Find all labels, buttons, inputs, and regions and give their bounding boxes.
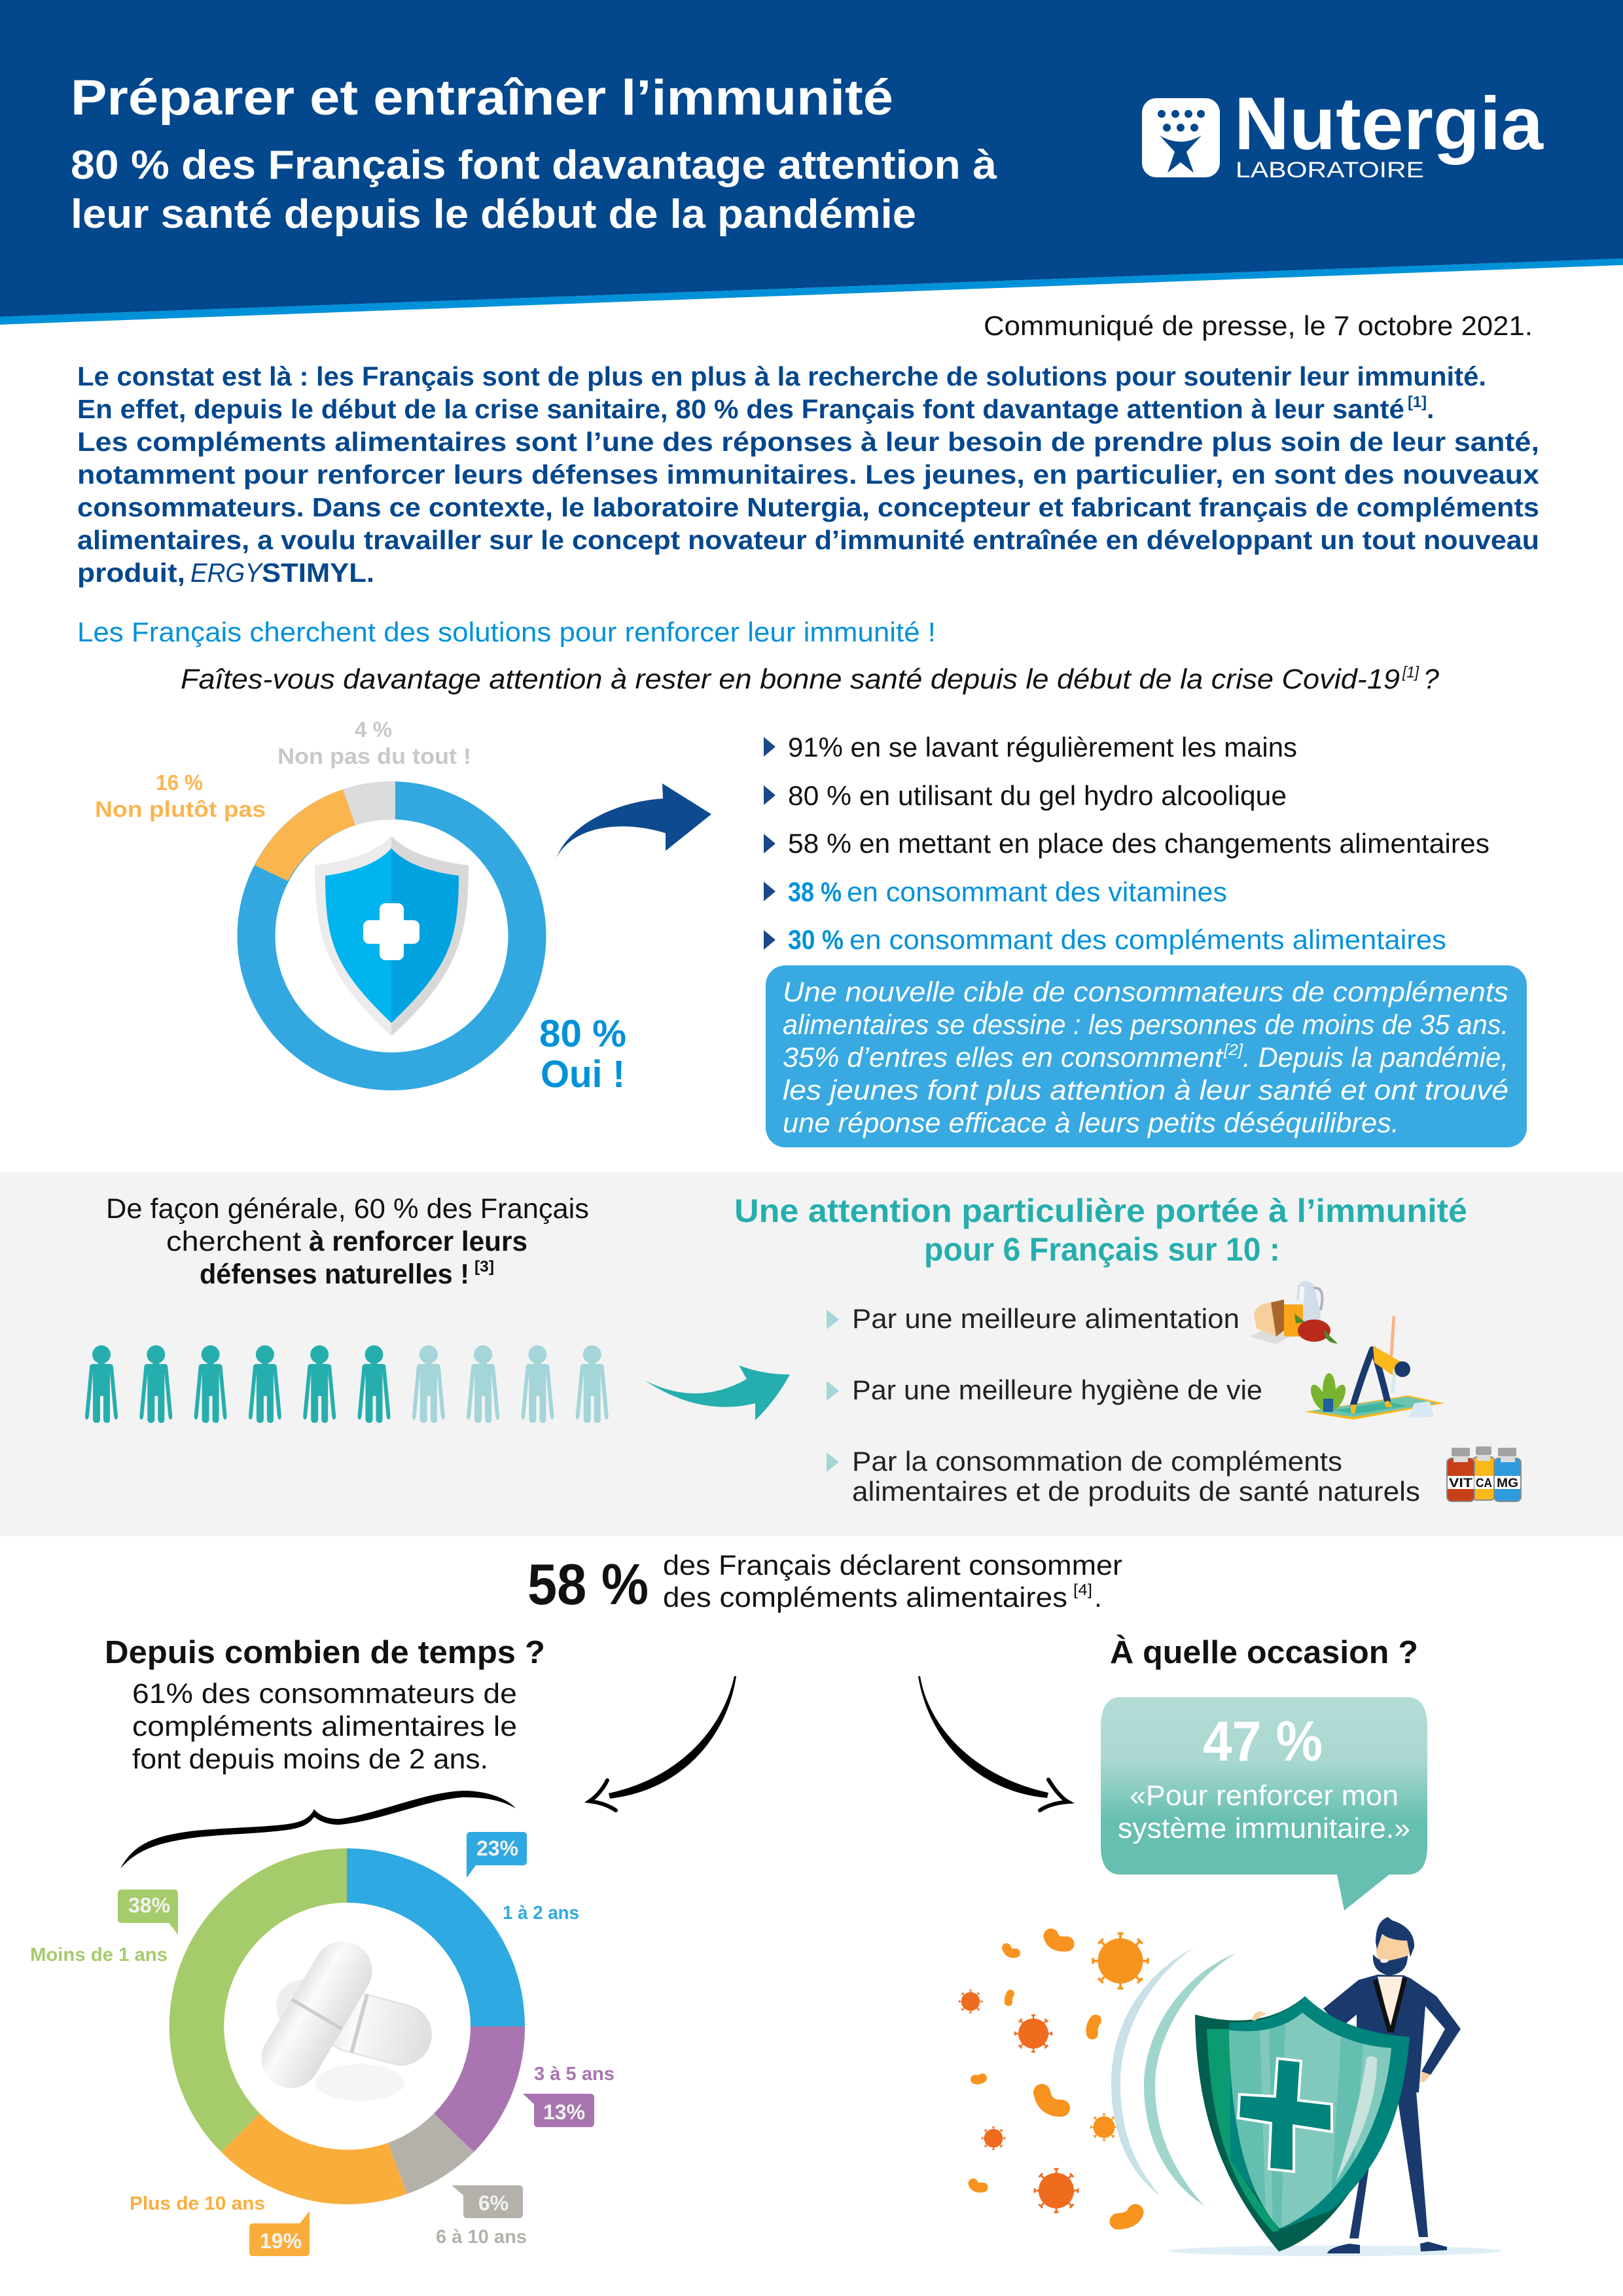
bubble: 6 % <box>452 2185 523 2218</box>
intro paragraph: . <box>1427 394 1434 424</box>
donut chart: attention to health <box>255 781 527 1071</box>
list item: alimentation: Par une meilleure alimentation <box>852 1303 1240 1334</box>
icon: bottles: CA <box>1476 1477 1492 1490</box>
text: 60 % des Français: à renforcer leurs <box>309 1226 527 1257</box>
label: Moins de 1 ans: Moins de 1 ans <box>30 1945 168 1965</box>
intro paragraph: En effet, depuis le début de la crise sanitaire, 80 % des Français font davantage attention à leur santé <box>77 394 1404 424</box>
bullet 5: en consommant des compléments alimentaires <box>849 924 1446 955</box>
subtitle: 80 % des Français font davantage attention à <box>71 143 997 188</box>
list item: compléments <box>827 1446 1420 1507</box>
text: 60 % des Français <box>106 1193 589 1290</box>
arrow: left curved <box>590 1676 736 1810</box>
press release date: Communiqué de presse, le 7 octobre 2021. <box>984 310 1533 341</box>
callout: nouvelle cible <box>766 965 1527 1147</box>
label: 6 à 10 ans: 6 à 10 ans <box>436 2227 527 2248</box>
heading: attention immunité: pour 6 Français sur 10 : <box>924 1231 1280 1268</box>
survey question: ? <box>1423 664 1439 695</box>
heading: attention immunité <box>734 1193 1467 1268</box>
list item: compléments: Par la consommation de compléments <box>852 1446 1342 1477</box>
illustration: man with shield <box>1168 1917 1502 2256</box>
speech bubble: 47 % <box>1101 1697 1427 1910</box>
callout: nouvelle cible: . Depuis la pandémie, <box>1243 1042 1508 1073</box>
donut chart: durée de consommation <box>169 1848 525 2204</box>
label: 4 %: Non pas du tout ! <box>277 744 471 769</box>
bubble: 23 % <box>467 1832 527 1878</box>
label: Plus de 10 ans: Plus de 10 ans <box>130 2193 265 2214</box>
stat: 58 %: . <box>1094 1582 1102 1613</box>
bullet 1: 91% en se lavant régulièrement les mains <box>788 732 1297 762</box>
list item: hygiène de vie: Par une meilleure hygiène de vie <box>852 1374 1262 1405</box>
label: 80 % <box>539 1013 626 1096</box>
callout: nouvelle cible: les jeunes font plus attention à leur santé et ont trouvé <box>783 1075 1508 1106</box>
text: 60 % des Français: cherchent <box>166 1226 301 1257</box>
heading: attention immunité: Une attention particulière portée à l’immunité <box>734 1193 1467 1229</box>
intro paragraph: alimentaires, a voulu travailler sur le concept novateur d’immunité entraînée en développant un tout nouveau <box>77 525 1539 555</box>
bullet 4: en consommant des vitamines <box>847 876 1227 907</box>
logo: Nutergia <box>1142 82 1544 183</box>
stat: 58 %: des Français déclarent consommer <box>663 1550 1122 1581</box>
stat: 58 %: 58 % <box>527 1552 649 1617</box>
title: Préparer et entraîner l’immunité <box>71 70 893 126</box>
illustration: shockwave arcs <box>1111 1948 1236 2206</box>
bubble: 6 %: 6% <box>478 2191 508 2215</box>
icon: green shield <box>1195 1996 1410 2251</box>
panel: grey band <box>0 1172 1623 1536</box>
callout: nouvelle cible: une réponse efficace à leurs petits déséquilibres. <box>783 1107 1399 1139</box>
bubble: 23 %: 23% <box>476 1837 518 1860</box>
callout: nouvelle cible: [2] <box>1223 1041 1243 1059</box>
icon: bottles: VIT <box>1449 1477 1472 1490</box>
bubble: 13 %: 13% <box>543 2100 585 2124</box>
intro paragraph: Les compléments alimentaires sont l’une des réponses à leur besoin de prendre plus soin de leur santé, <box>77 427 1539 457</box>
logo: Nutergia: LABORATOIRE <box>1236 158 1424 183</box>
label: 16 %: Non plutôt pas <box>95 797 266 822</box>
callout: nouvelle cible: Une nouvelle cible de consommateurs de compléments <box>783 977 1508 1008</box>
label: 16 % <box>95 770 266 822</box>
intro paragraph: produit, <box>77 558 185 588</box>
intro paragraph: notamment pour renforcer leurs défenses immunitaires. Les jeunes, en particulier, en sont des nouveaux <box>77 459 1539 490</box>
brace <box>120 1791 516 1869</box>
bubble: 13 % <box>523 2094 594 2127</box>
label: 80 %: 80 % <box>539 1013 626 1055</box>
heading: À quelle occasion: À quelle occasion ? <box>1110 1635 1418 1670</box>
stat: 58 %: des compléments alimentaires <box>663 1582 1067 1613</box>
survey question: [1] <box>1402 664 1419 681</box>
intro paragraph: STIMYL. <box>262 558 374 588</box>
label: 3 à 5 ans: 3 à 5 ans <box>534 2064 615 2085</box>
label: 1 à 2 ans: 1 à 2 ans <box>503 1903 579 1924</box>
intro paragraph <box>77 361 1539 588</box>
callout: nouvelle cible: 35% d’entres elles en consomment <box>783 1042 1224 1073</box>
illustration: bacteria and viruses <box>959 1933 1148 2221</box>
logo: Nutergia: Nutergia <box>1234 82 1544 166</box>
section heading: Les Français cherchent des solutions pour renforcer leur immunité ! <box>77 617 936 647</box>
bullet 2: 80 % en utilisant du gel hydro alcoolique <box>788 780 1287 811</box>
icon: food <box>1250 1281 1338 1344</box>
text: 60 % des Français: De façon générale, 60 % des Français <box>106 1193 589 1225</box>
bullet 3: 58 % en mettant en place des changements alimentaires <box>788 828 1489 859</box>
stat: 58 %: [4] <box>1073 1581 1092 1599</box>
text: 61 % <box>132 1678 517 1775</box>
icon: capsules <box>251 1930 438 2101</box>
bubble: 38 %: 38% <box>128 1893 170 1917</box>
intro paragraph: [1] <box>1408 393 1427 411</box>
label: 4 % <box>277 717 471 769</box>
speech bubble: 47 %: système immunitaire.» <box>1118 1812 1410 1844</box>
bubble: 19 %: 19% <box>260 2229 302 2253</box>
arrow: teal <box>645 1365 790 1420</box>
icon: bottles: MG <box>1497 1477 1518 1490</box>
survey question: Faîtes-vous davantage attention à rester en bonne santé depuis le début de la crise Covid-19 <box>181 664 1400 695</box>
label: 16 %: 16 % <box>156 770 203 795</box>
heading: Depuis combien de temps: Depuis combien de temps ? <box>105 1635 545 1670</box>
label: 80 %: Oui ! <box>541 1053 625 1096</box>
intro paragraph: Le constat est là : les Français sont de plus en plus à la recherche de solutions pour soutenir leur immunité. <box>77 361 1486 391</box>
callout: nouvelle cible: alimentaires se dessine : les personnes de moins de 35 ans. <box>783 1009 1508 1041</box>
text: 60 % des Français: [3] <box>474 1258 494 1276</box>
stat: 58 % <box>527 1550 1122 1617</box>
bullet 5: 30 % <box>788 924 844 955</box>
bullet list <box>764 732 1489 955</box>
subtitle: leur santé depuis le début de la pandémie <box>71 192 916 237</box>
arrow: right curved <box>918 1676 1068 1810</box>
text: 61 %: font depuis moins de 2 ans. <box>132 1744 488 1775</box>
subtitle <box>71 143 997 237</box>
label: 4 %: 4 % <box>355 717 392 742</box>
bubble: 38 % <box>118 1890 178 1935</box>
intro paragraph: ERGY <box>190 558 263 588</box>
bubble: 19 % <box>249 2211 310 2256</box>
icon: bottles <box>1447 1446 1521 1501</box>
bullet 4: 38 % <box>788 876 842 907</box>
intro paragraph: consommateurs. Dans ce contexte, le laboratoire Nutergia, concepteur et fabricant français de compléments <box>77 492 1539 522</box>
list item: compléments: alimentaires et de produits de santé naturels <box>852 1476 1420 1507</box>
speech bubble: 47 %: «Pour renforcer mon <box>1130 1780 1399 1812</box>
text: 61 %: 61% des consommateurs de <box>132 1678 517 1710</box>
speech bubble: 47 %: 47 % <box>1203 1710 1323 1773</box>
text: 60 % des Français: défenses naturelles ! <box>200 1259 469 1290</box>
text: 61 %: compléments alimentaires le <box>132 1711 517 1742</box>
header band <box>0 0 1623 325</box>
icon: blue shield <box>315 836 469 1036</box>
pictogram: 6 people out of 10 <box>85 1346 609 1423</box>
arrow: blue <box>556 783 711 858</box>
icon: yoga <box>1304 1316 1444 1420</box>
